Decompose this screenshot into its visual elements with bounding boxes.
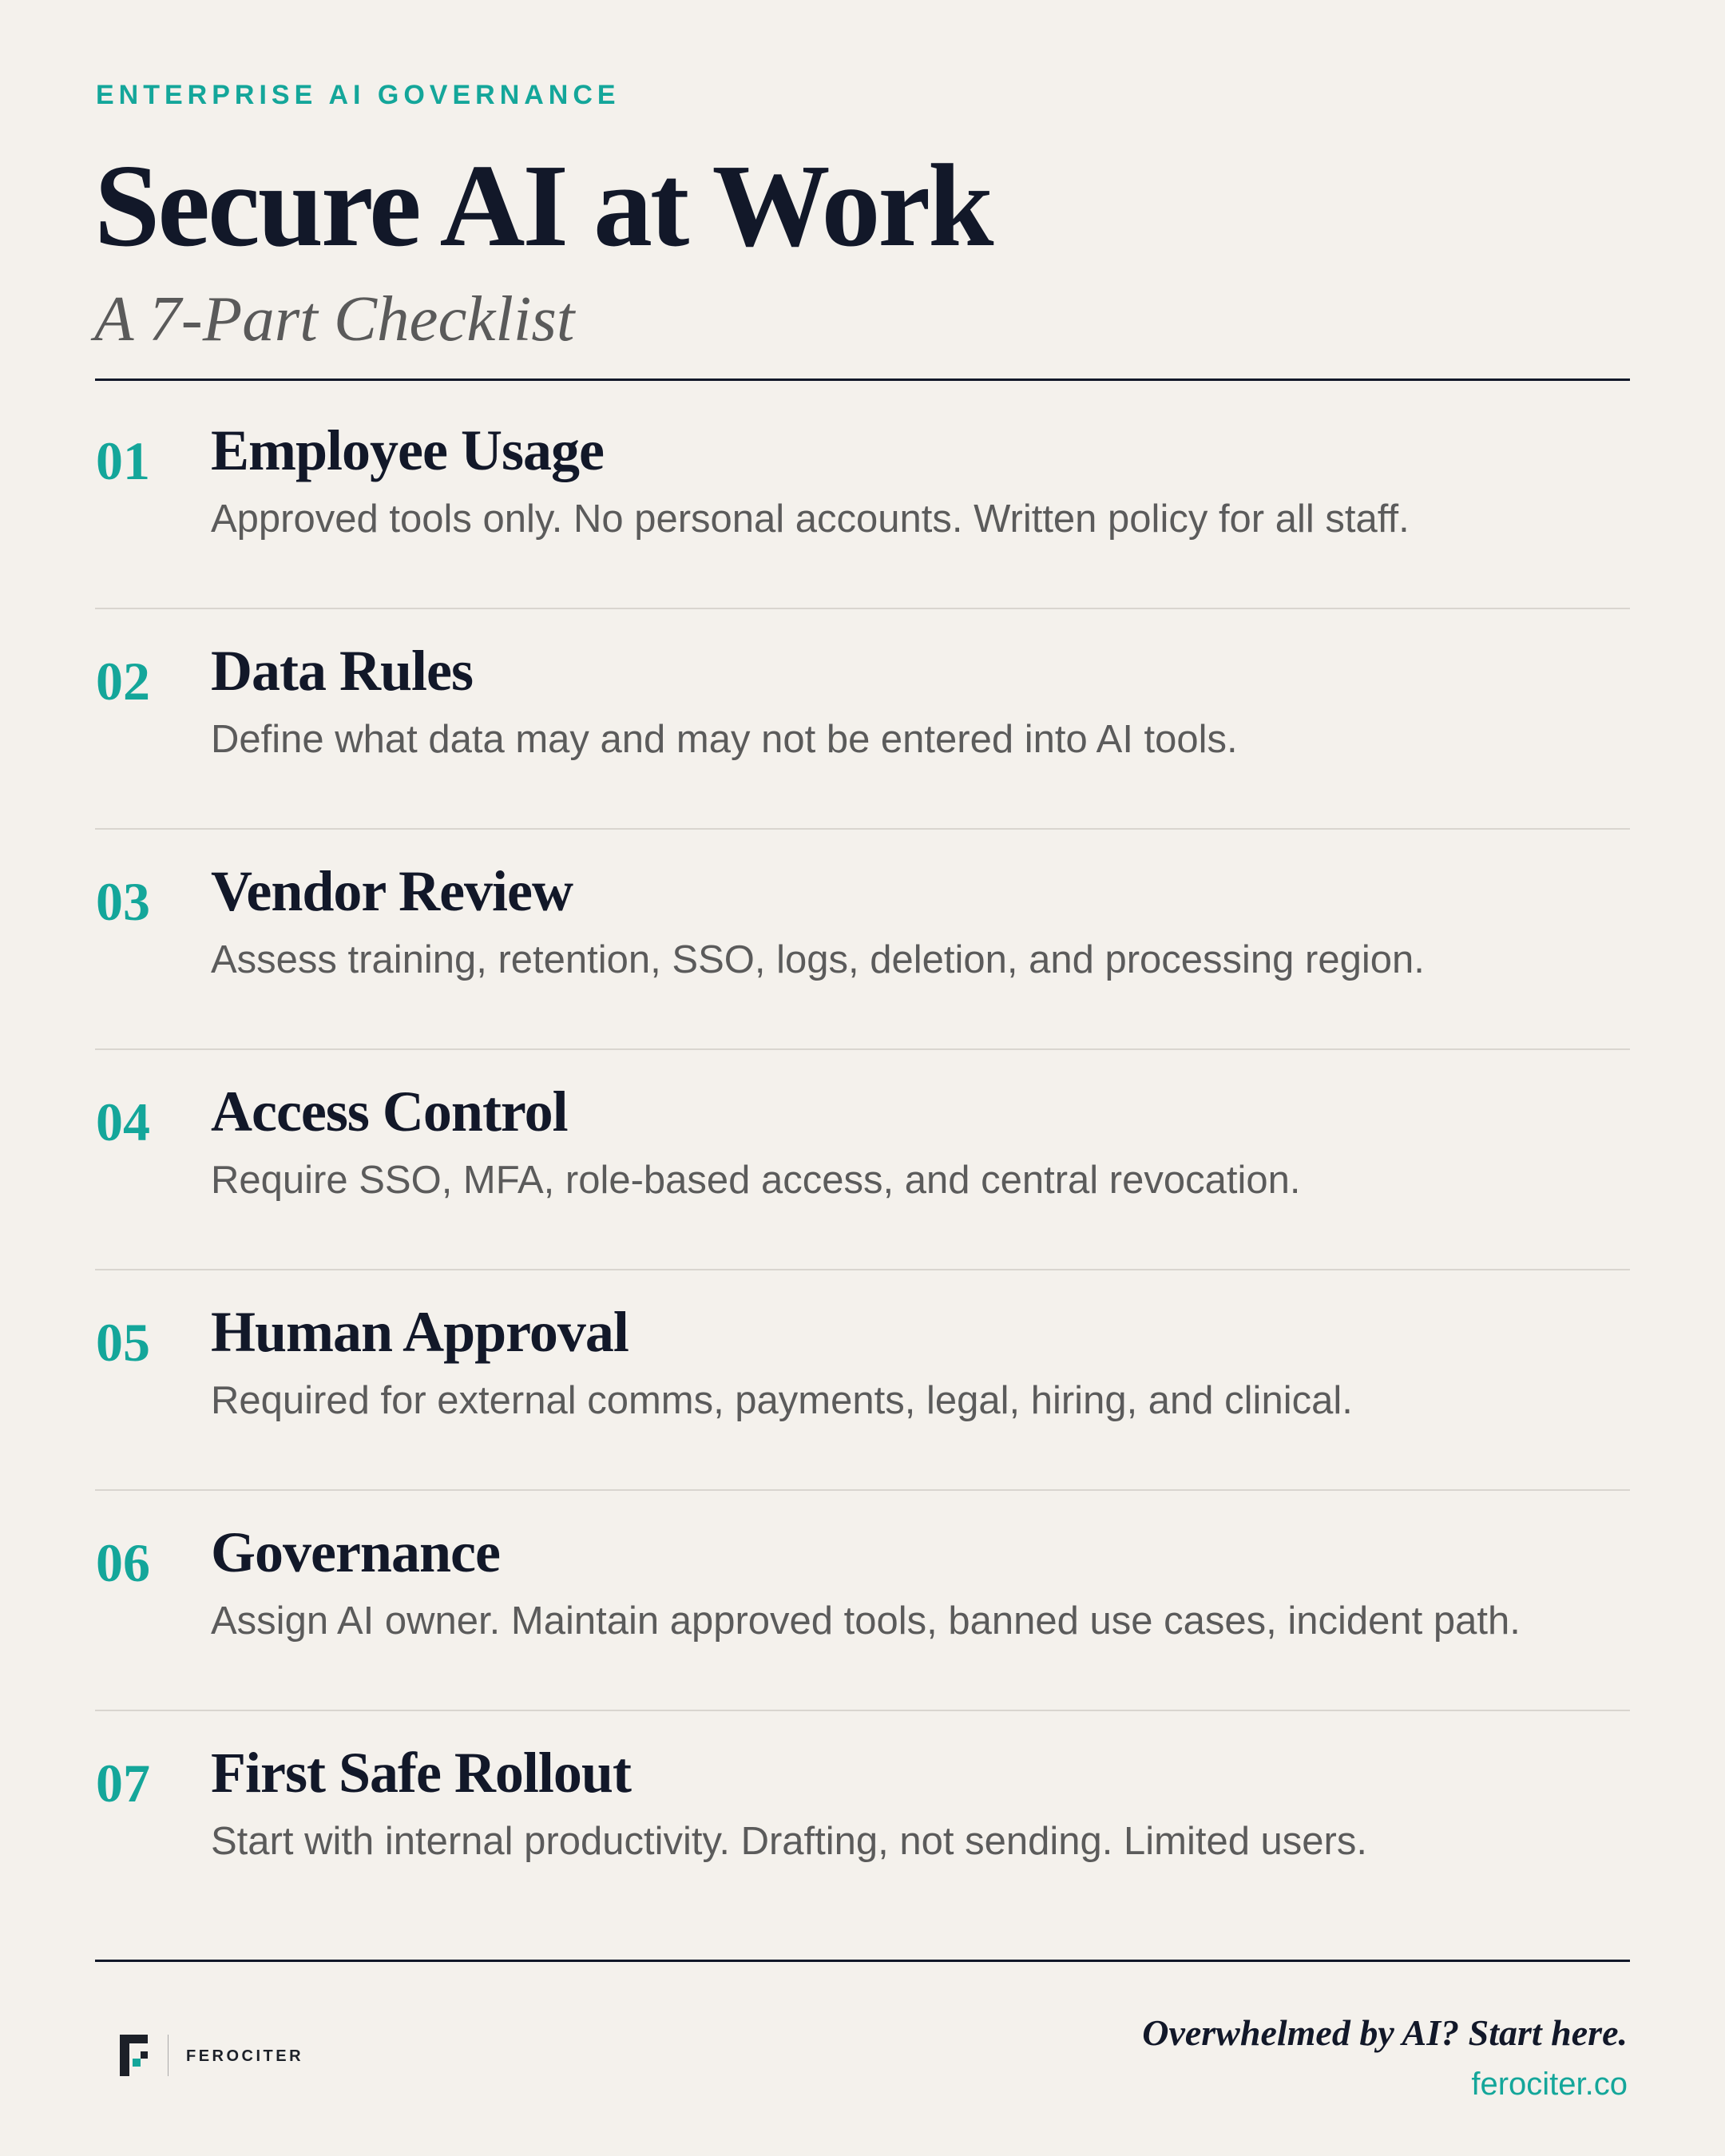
item 07: [96, 1741, 1367, 1863]
number 02: 02: [96, 651, 150, 711]
website: ferociter.co: [1471, 2067, 1628, 2102]
number 01: 01: [96, 430, 150, 491]
eyebrow: ENTERPRISE AI GOVERNANCE: [96, 80, 621, 110]
item 03: [96, 859, 1425, 981]
item 04: [96, 1080, 1300, 1202]
number 04: 04: [96, 1092, 150, 1152]
description: Assign AI owner. Maintain approved tools, banned use cases, incident path.: [211, 1599, 1521, 1643]
heading: Governance: [211, 1520, 500, 1584]
subtitle: A 7-Part Checklist: [94, 283, 574, 355]
number 03: 03: [96, 871, 150, 932]
logo: [120, 2035, 303, 2076]
heading: First Safe Rollout: [211, 1741, 631, 1805]
number 07: 07: [96, 1753, 150, 1813]
description: Assess training, retention, SSO, logs, deletion, and processing region.: [211, 938, 1425, 981]
item 01: [96, 418, 1410, 541]
icon: F mark: [120, 2035, 148, 2076]
number 06: 06: [96, 1532, 150, 1593]
description: Required for external comms, payments, legal, hiring, and clinical.: [211, 1379, 1353, 1422]
item 02: [96, 639, 1238, 761]
title: Secure AI at Work: [94, 141, 991, 271]
description: Require SSO, MFA, role-based access, and central revocation.: [211, 1159, 1300, 1202]
description: Approved tools only. No personal accounts. Written policy for all staff.: [211, 497, 1410, 541]
heading: Data Rules: [211, 639, 473, 703]
description: Define what data may and may not be entered into AI tools.: [211, 718, 1238, 761]
heading: Human Approval: [211, 1300, 629, 1364]
number 05: 05: [96, 1312, 150, 1373]
heading: Access Control: [211, 1080, 568, 1143]
tagline: Overwhelmed by AI? Start here.: [1142, 2012, 1628, 2053]
item 05: [96, 1300, 1353, 1422]
item 06: [96, 1520, 1521, 1643]
heading: Vendor Review: [211, 859, 573, 923]
heading: Employee Usage: [211, 418, 604, 482]
brand name: FEROCITER: [186, 2047, 303, 2065]
description: Start with internal productivity. Drafting, not sending. Limited users.: [211, 1820, 1367, 1863]
